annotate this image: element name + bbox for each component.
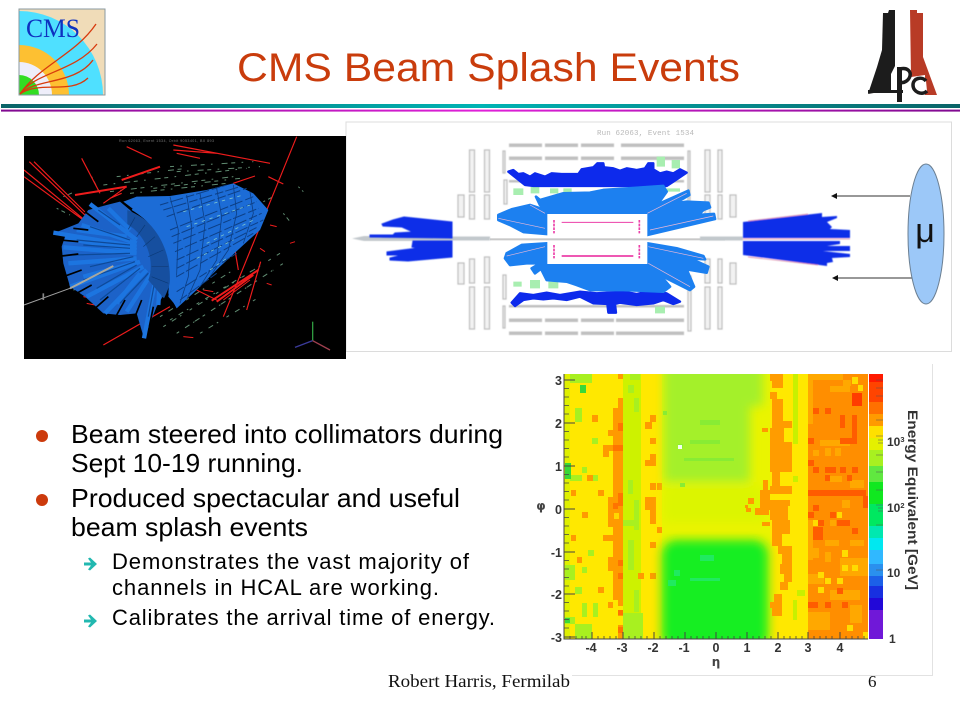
red tracks xyxy=(24,137,297,345)
bullet 1 text: Sept 10-19 running. xyxy=(71,448,303,478)
band at eta plus 2 xyxy=(770,374,792,616)
bullet 2 text: beam splash events xyxy=(71,512,308,542)
x axis labels xyxy=(585,641,844,655)
outer barrel bottom xyxy=(512,292,680,313)
colour scale xyxy=(869,374,883,639)
sub-bullet arrow 2 xyxy=(84,614,97,628)
inner barrel and endcaps xyxy=(498,186,715,292)
central calorimeter and tracker view xyxy=(490,157,725,313)
x axis labels: -3 xyxy=(616,641,628,655)
logo: 4pc xyxy=(868,10,937,102)
header rule: teal xyxy=(1,104,960,108)
title: CMS Beam Splash Events xyxy=(237,46,740,90)
text block: bullets xyxy=(36,419,503,630)
panel: 3D event display xyxy=(24,136,346,359)
header rule: magenta xyxy=(1,110,960,112)
tracker hits xyxy=(57,162,303,333)
y axis labels: 3 xyxy=(555,374,562,388)
inner box pink strips xyxy=(554,220,639,258)
barrel end disc xyxy=(127,210,171,298)
front fan body xyxy=(53,202,170,338)
sub-bullet arrow 1 xyxy=(84,558,97,570)
forward minus green cells xyxy=(565,374,598,639)
colour scale labels xyxy=(887,435,905,646)
tracker inner box xyxy=(547,214,647,264)
x axis title: η xyxy=(712,655,720,669)
calorimeter: right forward xyxy=(743,213,850,266)
muon symbol: μ xyxy=(915,212,935,250)
arrow: lower muon flux xyxy=(832,275,912,281)
calorimeter: left forward xyxy=(370,217,452,261)
bullet 1 text: Beam steered into collimators during xyxy=(71,419,503,449)
x axis labels: 0 xyxy=(713,641,720,655)
front fan spikes xyxy=(53,204,160,338)
disc spokes xyxy=(128,217,168,283)
tracker hits xyxy=(513,157,680,313)
x axis labels: 1 xyxy=(744,641,751,655)
panel: energy heat map xyxy=(530,360,932,676)
bullet 2 text xyxy=(71,483,460,542)
colour scale labels: 3 xyxy=(900,435,905,444)
logo: CMS xyxy=(18,8,106,96)
pink highlights in sprays xyxy=(498,193,713,287)
fan outer dark gaps xyxy=(53,212,153,327)
sub-bullet text 1 xyxy=(112,549,470,600)
orientation axes xyxy=(295,322,330,350)
beam line xyxy=(70,266,113,288)
sub-bullet text 1: Demonstrates the vast majority of xyxy=(112,549,470,574)
logo: CMS: CMS xyxy=(26,14,80,43)
footer: presenter credit: Robert Harris, Fermilab xyxy=(388,671,570,691)
colour scale title: Energy Equivalent [GeV] xyxy=(905,410,921,590)
caption: Run 62063, Event 1534, Orbit 9053401, BX 893 xyxy=(119,139,214,143)
forward plus region xyxy=(808,374,868,639)
plot frame and ticks xyxy=(564,374,868,639)
colour scale labels: 10 xyxy=(887,501,900,515)
fan shadow gaps xyxy=(73,210,155,317)
outer barrel top xyxy=(508,163,687,186)
panel: longitudinal detector event display xyxy=(346,122,952,352)
bullet 2 marker xyxy=(36,494,48,506)
central detail pixels xyxy=(663,411,734,487)
bullet 1 marker xyxy=(36,430,48,442)
y axis title: φ xyxy=(536,499,546,513)
colour scale labels: 10 xyxy=(887,566,901,580)
barrel grid lines xyxy=(160,185,263,303)
colour scale labels: 10 xyxy=(887,435,900,449)
y axis labels: 1 xyxy=(555,460,562,474)
y axis labels: -1 xyxy=(551,546,562,560)
central barrel region xyxy=(662,374,770,639)
sub-bullet text 2: Calibrates the arrival time of energy. xyxy=(112,605,495,630)
muon chambers xyxy=(458,144,736,335)
colour scale labels: 1 xyxy=(889,632,896,646)
orange column at eta minus 3 xyxy=(571,374,662,639)
footer: page number: 6 xyxy=(868,672,876,691)
heat map cells xyxy=(564,360,868,650)
y axis labels: -2 xyxy=(551,588,562,602)
beam pipe outer segments xyxy=(352,236,743,241)
y axis labels: 0 xyxy=(555,503,562,517)
run and event caption: Run 62063, Event 1534 xyxy=(597,130,694,138)
x axis labels: 3 xyxy=(805,641,812,655)
beam pipe xyxy=(490,238,725,240)
sub-bullet text 1: channels in HCAL are working. xyxy=(112,575,439,600)
barrel rim xyxy=(132,205,177,307)
x axis labels: -4 xyxy=(585,641,597,655)
band at eta minus 2.5 xyxy=(623,374,641,639)
colour scale labels: 2 xyxy=(900,501,905,510)
x axis labels: 4 xyxy=(837,641,844,655)
bullet 1 text xyxy=(71,419,503,478)
bullet 2 text: Produced spectacular and useful xyxy=(71,483,460,513)
x axis labels: -1 xyxy=(678,641,690,655)
y axis labels xyxy=(551,374,562,645)
barrel body xyxy=(123,183,268,308)
x axis labels: -2 xyxy=(647,641,659,655)
x axis labels: 2 xyxy=(775,641,782,655)
arrow: upper muon flux xyxy=(831,193,910,199)
y axis labels: 2 xyxy=(555,417,562,431)
muon source ellipse xyxy=(908,164,944,304)
y axis labels: -3 xyxy=(551,631,562,645)
